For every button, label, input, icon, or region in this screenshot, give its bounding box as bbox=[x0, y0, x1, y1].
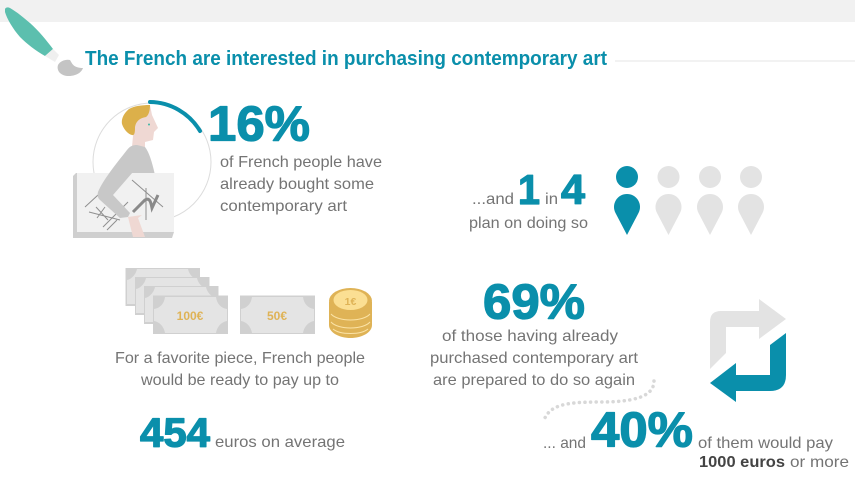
stat: 69%: are prepared to do so again bbox=[433, 372, 635, 389]
icon: people one in four bbox=[614, 166, 764, 235]
stat: 69%: 69% bbox=[483, 276, 585, 330]
title: The French are interested in purchasing contemporary art bbox=[85, 48, 607, 70]
stat: 454 euros bbox=[140, 410, 345, 456]
stat: 454 euros: 454 bbox=[140, 410, 210, 456]
icon: repeat arrows bbox=[710, 299, 786, 402]
stat: 40%: 40% bbox=[591, 404, 693, 458]
stat: 40%: ... and bbox=[543, 435, 586, 452]
text: favorite piece: For a favorite piece, French people bbox=[115, 350, 365, 367]
text: favorite piece bbox=[115, 350, 365, 389]
icon: paint brush bbox=[5, 7, 83, 76]
stat: 16% bbox=[208, 98, 382, 215]
icon: coin stack: 1€ bbox=[345, 296, 356, 308]
stat: 1 in 4: 4 bbox=[561, 166, 586, 213]
icon: banknotes: 50€ bbox=[267, 309, 287, 323]
stat: 454 euros: euros on average bbox=[215, 434, 345, 451]
stat: 40%: or more bbox=[790, 454, 849, 471]
icon: banknotes bbox=[126, 268, 315, 334]
stat: 69% bbox=[430, 276, 639, 389]
stat: 16%: contemporary art bbox=[220, 198, 348, 215]
text: favorite piece: would be ready to pay up to bbox=[140, 372, 339, 389]
stat: 1 in 4: 1 bbox=[518, 166, 540, 213]
icon: coin stack bbox=[329, 288, 372, 338]
dotted connector bbox=[544, 381, 654, 420]
stat: 1 in 4: ...and bbox=[472, 191, 514, 208]
stat: 1 in 4: plan on doing so bbox=[469, 215, 588, 232]
stat: 16%: of French people have bbox=[220, 154, 382, 171]
stat: 69%: of those having already bbox=[442, 328, 618, 345]
stat: 40%: 1000 euros bbox=[699, 454, 785, 471]
stat: 40% bbox=[543, 404, 849, 471]
person with artwork illustration bbox=[73, 102, 211, 238]
stat: 16%: already bought some bbox=[220, 176, 374, 193]
stat: 16%: 16% bbox=[208, 98, 310, 152]
stat: 1 in 4: in bbox=[545, 191, 558, 208]
stat: 40%: of them would pay bbox=[698, 435, 833, 452]
top band bbox=[0, 0, 855, 22]
stat: 1 in 4 bbox=[469, 166, 588, 232]
icon: banknotes: 100€ bbox=[177, 309, 204, 323]
stat: 69%: purchased contemporary art bbox=[430, 350, 639, 367]
